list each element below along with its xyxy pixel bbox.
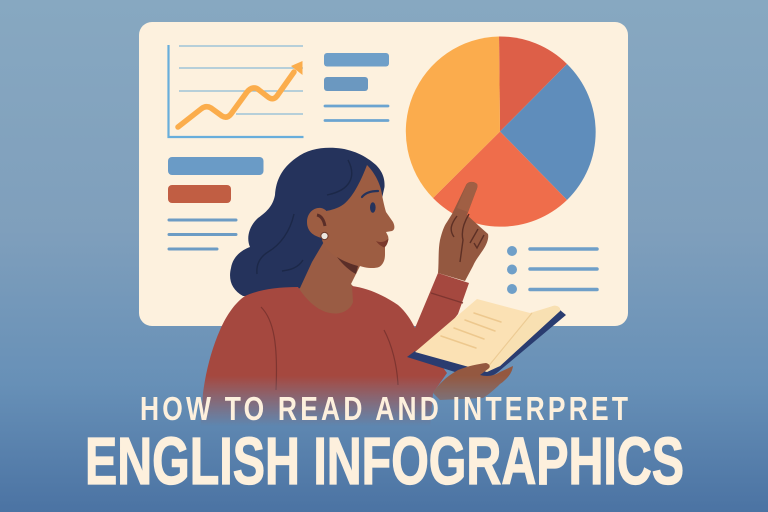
open book: [407, 299, 566, 377]
hair strands: [257, 160, 352, 274]
pie chart: [406, 36, 596, 227]
jaw shadow: [337, 257, 358, 274]
panel: presentation board: [139, 22, 628, 326]
hair: [230, 148, 385, 300]
face: [322, 165, 394, 268]
neck: [299, 243, 360, 314]
sweater with raised arm: [200, 273, 469, 430]
line chart: [168, 45, 304, 137]
text blocks: top right of chart: [324, 53, 389, 120]
title: [85, 391, 684, 499]
lower hand: [433, 363, 513, 400]
ear: [307, 208, 326, 238]
subtitle: how to read and interpret: HOW TO READ AND INTERPRET: [140, 391, 628, 428]
text blocks: lower left: [168, 157, 264, 249]
eye: [370, 202, 376, 213]
earring: [321, 232, 328, 240]
mouth: [376, 238, 388, 248]
sweater folds: [261, 293, 463, 390]
pointing hand: [438, 182, 488, 281]
figure: woman holding book: [200, 148, 566, 430]
eyebrow: [362, 191, 378, 197]
bullet list: [507, 246, 597, 294]
